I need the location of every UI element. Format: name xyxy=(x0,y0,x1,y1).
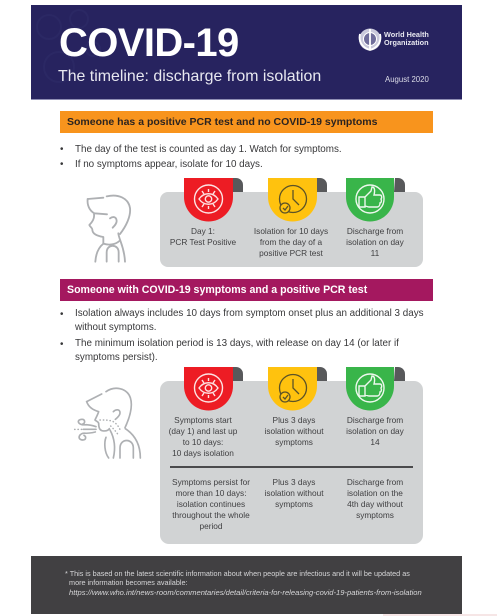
subtitle: The timeline: discharge from isolation xyxy=(58,68,321,85)
label: discharge day 11: Discharge from xyxy=(347,226,403,236)
bullet list: no symptoms: If no symptoms appear, isolate for 10 days. xyxy=(75,159,263,170)
label: discharge day 11: 11 xyxy=(371,248,379,258)
label: discharge on 4th day: symptoms xyxy=(356,510,394,520)
badge: green discharge xyxy=(346,178,405,222)
label: discharge on 4th day: Discharge from xyxy=(347,477,403,487)
footnote text: more information becomes available: xyxy=(69,578,188,587)
badge: red symptoms xyxy=(184,367,243,410)
badge: yellow plus 3 days xyxy=(268,367,327,410)
bullet list: no symptoms xyxy=(60,144,342,170)
label: discharge on 4th day: 4th day without xyxy=(347,499,403,509)
heading: with symptoms: Someone with COVID-19 symptoms and a positive PCR test xyxy=(67,284,367,296)
bullet list: no symptoms: • xyxy=(60,159,63,170)
heading: with symptoms xyxy=(60,279,433,301)
label: symptoms persist: period xyxy=(199,521,223,531)
label: discharge day 14: Discharge from xyxy=(347,415,403,425)
panel: timeline without symptoms xyxy=(160,192,423,267)
icon: WHO emblem xyxy=(358,28,382,51)
heading: no symptoms: Someone has a positive PCR test and no COVID-19 symptoms xyxy=(67,116,377,128)
bullet list: with symptoms: Isolation always includes 10 days from symptom onset plus an additional 3 days xyxy=(75,308,424,319)
label: discharge day 11 xyxy=(346,226,404,258)
label: isolation for 10 days: from the day of a xyxy=(260,237,322,247)
label: day 1: PCR Test Positive xyxy=(170,237,236,247)
bullet list: with symptoms: symptoms persist). xyxy=(75,352,158,362)
WHO wordmark: World Health xyxy=(384,30,429,39)
bullet list: with symptoms: The minimum isolation period is 13 days, with release on day 14 (or later if xyxy=(75,338,399,349)
label: symptoms persist: Symptoms persist for xyxy=(172,477,250,487)
bullet list: with symptoms: without symptoms. xyxy=(75,322,157,332)
label: isolation for 10 days: Isolation for 10 days xyxy=(254,226,328,236)
WHO wordmark xyxy=(384,30,429,47)
label: day 1 xyxy=(170,226,236,247)
label: symptoms persist xyxy=(172,477,250,531)
label: day 1: Day 1: xyxy=(191,226,215,236)
icon: person coughing xyxy=(74,387,142,459)
WHO wordmark: Organization xyxy=(384,38,429,47)
footnote text xyxy=(65,568,422,597)
date: August 2020 xyxy=(385,75,429,84)
label: symptoms start: (day 1) and last up xyxy=(169,426,237,436)
label: plus 3 days second row: symptoms xyxy=(275,499,313,509)
label: discharge day 14 xyxy=(346,415,404,447)
label: symptoms start xyxy=(169,415,237,458)
title: COVID-19 xyxy=(59,21,239,65)
label: plus 3 days: symptoms xyxy=(275,437,313,447)
label: isolation for 10 days xyxy=(254,226,328,258)
label: symptoms persist: isolation continues xyxy=(177,499,245,509)
bullet list: with symptoms: • xyxy=(60,339,63,350)
badge: yellow isolation xyxy=(268,178,327,222)
label: plus 3 days second row: Plus 3 days xyxy=(273,477,315,487)
header banner xyxy=(31,5,462,100)
footnote text: https://www.who.int/news-room/commentaries/detail/criteria-for-releasing-covid-19-patients-from-isolation xyxy=(69,588,422,597)
badge: red day 1 xyxy=(184,178,243,222)
label: discharge on 4th day: isolation on the xyxy=(347,488,403,498)
label: plus 3 days second row xyxy=(264,477,324,509)
label: discharge day 11: isolation on day xyxy=(346,237,404,247)
label: symptoms persist: more than 10 days: xyxy=(175,488,247,498)
label: plus 3 days: isolation without xyxy=(264,426,324,436)
label: discharge on 4th day xyxy=(347,477,403,520)
label: symptoms start: Symptoms start xyxy=(174,415,232,425)
footnote text: * This is based on the latest scientific information about when people are infectious and it will be updated as xyxy=(65,568,410,578)
label: plus 3 days second row: isolation without xyxy=(264,488,324,498)
label: symptoms persist: throughout the whole xyxy=(172,510,250,520)
label: discharge day 14: 14 xyxy=(370,437,380,447)
icon: person without symptoms xyxy=(86,194,131,263)
panel: timeline with symptoms xyxy=(160,381,423,544)
heading: no symptoms xyxy=(60,111,433,133)
label: plus 3 days: Plus 3 days xyxy=(273,415,315,425)
badge: green discharge xyxy=(346,367,405,410)
label: plus 3 days xyxy=(264,415,324,447)
label: symptoms start: 10 days isolation xyxy=(172,448,234,458)
label: symptoms start: to 10 days: xyxy=(183,437,223,447)
bullet list: with symptoms xyxy=(60,308,424,362)
bullet list: with symptoms: • xyxy=(60,309,63,320)
bullet list: no symptoms: • xyxy=(60,144,63,155)
label: discharge day 14: isolation on day xyxy=(346,426,404,436)
footer xyxy=(31,556,462,614)
bullet list: no symptoms: The day of the test is counted as day 1. Watch for symptoms. xyxy=(75,144,342,155)
label: isolation for 10 days: positive PCR test xyxy=(259,248,323,258)
